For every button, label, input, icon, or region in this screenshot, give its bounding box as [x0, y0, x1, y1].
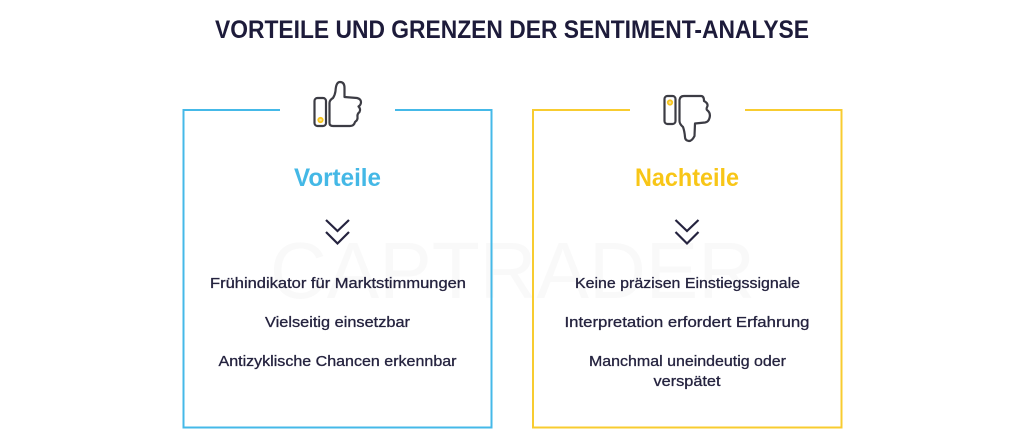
heading: Vorteile: Vorteile: [294, 164, 381, 192]
panel: Vorteile: [184, 82, 492, 428]
icon: thumbs down: [664, 96, 710, 141]
text: Vielseitig: Vielseitig einsetzbar: [265, 314, 410, 331]
text: Manchmal: [589, 353, 786, 390]
text: Interpretation: Interpretation erfordert Erfahrung: [564, 314, 810, 331]
panel: Nachteile: [533, 96, 842, 428]
panel border: Vorteile: [184, 110, 492, 428]
heading: Nachteile: Nachteile: [635, 164, 739, 192]
text: Manchmal: verspätet: [654, 373, 721, 390]
icon: thumbs up: [314, 82, 361, 126]
panel border: Nachteile: [533, 110, 842, 428]
text: Manchmal: Manchmal uneindeutig oder: [589, 353, 786, 370]
watermark: CAPTRADER: [270, 226, 755, 315]
text: Frühindikator: Frühindikator für Marktstimmungen: [210, 275, 466, 292]
text: Antizyklische: Antizyklische Chancen erkennbar: [218, 353, 456, 370]
icon: double chevron: [676, 220, 698, 244]
title: VORTEILE UND GRENZEN DER SENTIMENT-ANALYSE: [215, 16, 809, 44]
text: Keine präzisen: Keine präzisen Einstiegssignale: [575, 275, 800, 292]
icon: double chevron: [326, 220, 349, 244]
